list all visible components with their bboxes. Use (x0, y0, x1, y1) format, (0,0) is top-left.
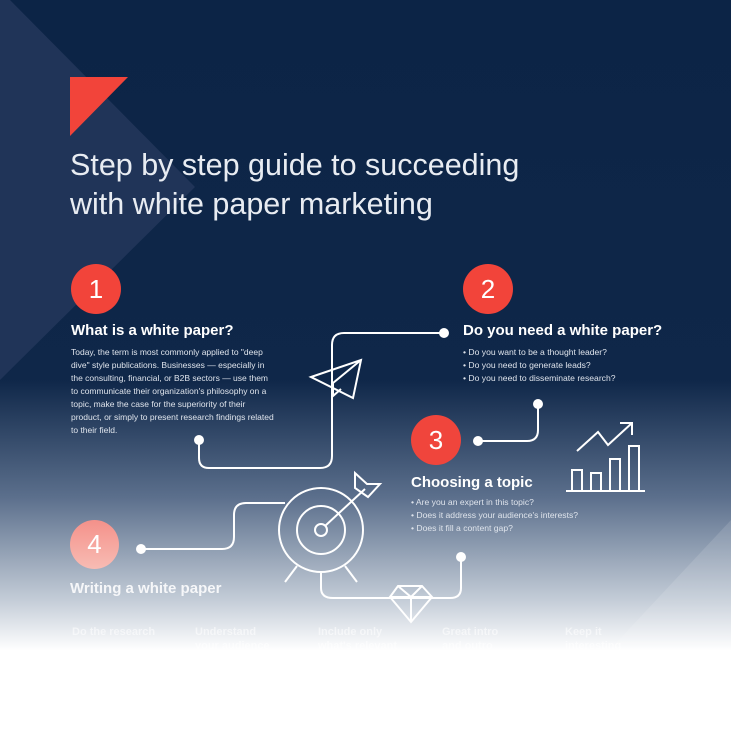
bullets 3: • Does it fill a content gap? (411, 523, 513, 533)
circle 3 (411, 415, 461, 465)
circle 4: 4 (87, 529, 102, 559)
step 1 (71, 264, 274, 435)
bullets 2 (463, 347, 616, 383)
bullets 2: • Do you need to disseminate research? (463, 373, 616, 383)
connector 3 to 4 (137, 503, 285, 553)
icon: paper plane (311, 360, 361, 398)
circle 1: 1 (89, 274, 103, 304)
circle 2 (463, 264, 513, 314)
bottom faint tips row: Great intro (442, 626, 498, 638)
connector 1 to 2 (195, 329, 448, 468)
icon: bar chart (566, 423, 645, 491)
circle 2: 2 (481, 274, 495, 304)
bottom faint tips row: Keep it (565, 626, 602, 638)
bullets 2: • Do you want to be a thought leader? (463, 347, 607, 357)
icon: target (279, 473, 380, 582)
bottom faint tips row: interesting (565, 640, 621, 652)
bottom faint tips row: Include only (318, 626, 382, 638)
bottom faint tips row: Do the research (72, 626, 155, 638)
bottom faint tips row (72, 626, 621, 652)
title: with white paper marketing (70, 187, 433, 221)
circle 3: 3 (429, 425, 443, 455)
bullets 3: • Are you an expert in this topic? (411, 497, 534, 507)
step 3 (411, 415, 578, 533)
bullets 3: • Does it address your audience's interests? (411, 510, 578, 520)
heading 2: Do you need a white paper? (463, 322, 662, 339)
bottom faint tips row: Understand (195, 626, 256, 638)
heading 3: Choosing a topic (411, 474, 533, 491)
bottom faint tips row: and outro (442, 640, 493, 652)
step 4 (70, 520, 222, 597)
bullets 2: • Do you need to generate leads? (463, 360, 591, 370)
circle 1 (71, 264, 121, 314)
connector 2 to 3 (474, 400, 542, 445)
title: Step by step guide to succeeding (70, 148, 519, 182)
icon: diamond (390, 586, 432, 622)
heading 1: What is a white paper? (71, 322, 234, 339)
heading 4: Writing a white paper (70, 580, 221, 597)
connector to diamond (321, 553, 465, 598)
bottom faint tips row: what's relevant (318, 640, 397, 652)
body 1: Today, the term is most commonly applied to "deep dive" style publications. Businesses — especially in the consulting, financial, or B2B sectors — use them to communicate their organization's philosophy on a topic, make the case for the superiority of their product, or simply to present research findings related to their field. (71, 347, 274, 435)
title (70, 148, 519, 221)
bottom faint tips row: your audience (195, 640, 270, 652)
circle 4 (70, 520, 119, 569)
bullets 3 (411, 497, 578, 533)
step 2 (463, 264, 662, 383)
